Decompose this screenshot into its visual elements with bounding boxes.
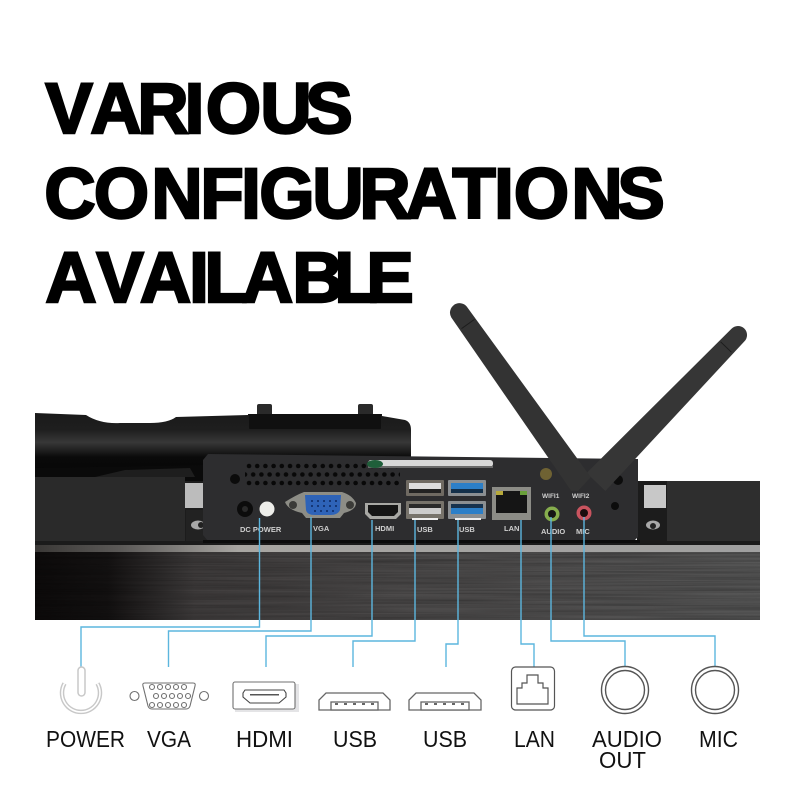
antenna left — [450, 303, 591, 491]
right bracket — [637, 481, 667, 541]
LAN port — [492, 487, 531, 520]
icon labels: HDMI — [236, 726, 293, 752]
left side box — [35, 477, 185, 545]
title: AVAILABLE — [45, 239, 414, 318]
USB ports blue — [448, 480, 486, 520]
title: CONFIGURATIONS — [44, 155, 665, 234]
icon: HDMI — [233, 682, 299, 712]
port labels: USB — [417, 525, 433, 534]
chrome rod — [368, 460, 493, 467]
icon: USB 1 — [319, 693, 390, 710]
module panel — [203, 454, 640, 543]
icon labels: MIC — [699, 726, 738, 752]
audio jack — [544, 506, 560, 522]
ground hole — [611, 502, 619, 510]
antenna right — [587, 326, 747, 491]
vent holes — [245, 462, 400, 489]
icon labels: AUDIO — [592, 726, 662, 752]
left bracket — [185, 481, 208, 541]
port labels — [240, 493, 590, 536]
title — [44, 70, 665, 318]
antenna base gold — [540, 468, 552, 480]
icon: USB 2 — [409, 693, 481, 710]
mic jack — [576, 506, 592, 520]
icon labels: USB — [423, 726, 467, 752]
VGA port — [285, 492, 356, 518]
icon: audio jack — [602, 666, 648, 714]
connector lines — [81, 517, 715, 667]
icon labels: OUT — [599, 747, 646, 773]
port labels: LAN — [504, 524, 519, 533]
title: VARIOUS — [45, 70, 353, 149]
icon labels — [46, 726, 738, 773]
port labels: AUDIO — [541, 527, 565, 536]
port labels: WIFI1 — [542, 493, 560, 500]
icon labels: LAN — [514, 726, 555, 752]
icon: power — [62, 667, 100, 712]
port labels: MIC — [576, 527, 590, 536]
icon labels: USB — [333, 726, 377, 752]
green marker — [367, 460, 383, 468]
icon: VGA — [130, 683, 208, 709]
port labels: DC POWER — [240, 525, 282, 534]
device photo — [35, 303, 760, 620]
mounting bar — [35, 404, 411, 482]
power button — [260, 502, 274, 516]
port labels: USB — [459, 525, 475, 534]
icon labels: VGA — [147, 726, 191, 752]
USB ports white — [406, 480, 444, 520]
port labels: VGA — [313, 524, 330, 533]
right side box — [667, 481, 760, 545]
port labels: HDMI — [375, 524, 394, 533]
icon labels: POWER — [46, 726, 125, 752]
port labels: WIFI2 — [572, 493, 590, 500]
DC jack — [237, 501, 253, 517]
HDMI port — [365, 503, 401, 519]
icon: mic jack — [692, 666, 738, 714]
wood base — [35, 541, 760, 620]
icon: LAN — [512, 667, 554, 710]
